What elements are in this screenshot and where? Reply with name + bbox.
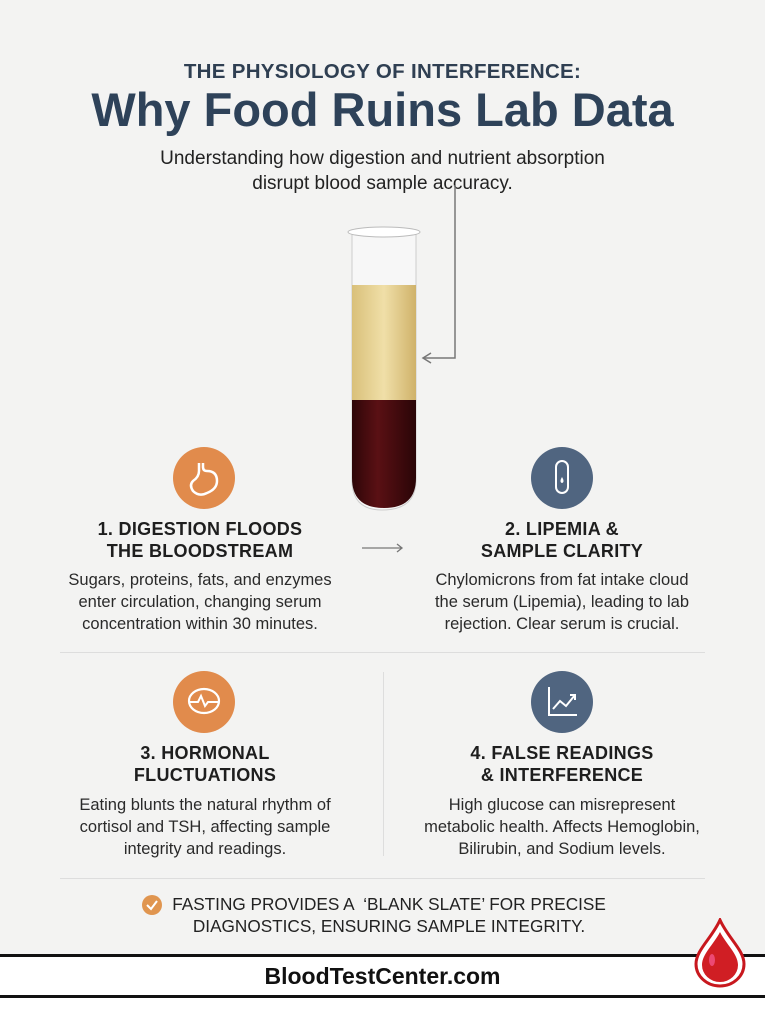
callout: fasting: FASTING PROVIDES A ‘BLANK SLATE’ FOR PRECISE — [172, 894, 606, 914]
body: cortisol and TSH, affecting sample — [80, 818, 330, 836]
body: the serum (Lipemia), leading to lab — [435, 593, 689, 611]
icon: stomach — [173, 447, 235, 509]
heading: & INTERFERENCE — [481, 765, 643, 785]
icon: blood drop logo — [694, 918, 746, 988]
panel 1: digestion — [68, 447, 332, 633]
blood tube illustration — [348, 185, 456, 510]
body: Sugars, proteins, fats, and enzymes — [68, 571, 332, 589]
body: enter circulation, changing serum — [78, 593, 322, 611]
icon: check — [142, 895, 162, 915]
heading — [98, 519, 302, 561]
icon: test tube — [531, 447, 593, 509]
heading: 3. HORMONAL — [140, 743, 270, 763]
title: Why Food Ruins Lab Data — [91, 83, 674, 136]
heading: 1. DIGESTION FLOODS — [98, 519, 302, 539]
kicker heading: THE PHYSIOLOGY OF INTERFERENCE: — [184, 60, 581, 83]
body — [68, 571, 332, 633]
body — [435, 571, 689, 633]
body: Bilirubin, and Sodium levels. — [458, 840, 666, 858]
subtitle: disrupt blood sample accuracy. — [252, 173, 513, 194]
footer: BloodTestCenter.com — [264, 963, 500, 989]
footer — [0, 954, 765, 998]
callout: fasting: DIAGNOSTICS, ENSURING SAMPLE INTEGRITY. — [193, 916, 585, 936]
small arrow — [362, 544, 403, 552]
body: Chylomicrons from fat intake cloud — [435, 571, 689, 589]
panel 4: false readings — [424, 671, 700, 858]
icon: brain — [173, 671, 235, 733]
heading — [134, 743, 276, 785]
body: Eating blunts the natural rhythm of — [79, 796, 331, 814]
subtitle: Understanding how digestion and nutrient absorption — [160, 148, 605, 169]
tube — [348, 227, 420, 510]
body: concentration within 30 minutes. — [82, 615, 318, 633]
heading: THE BLOODSTREAM — [107, 541, 293, 561]
heading: 4. FALSE READINGS — [470, 743, 654, 763]
body: integrity and readings. — [124, 840, 286, 858]
arrow to serum — [423, 185, 455, 363]
body — [79, 796, 331, 858]
panel 2: lipemia — [435, 447, 689, 633]
body — [424, 796, 700, 858]
heading: 2. LIPEMIA & — [505, 519, 619, 539]
heading: SAMPLE CLARITY — [481, 541, 643, 561]
callout: fasting — [142, 894, 606, 936]
subtitle — [160, 148, 605, 194]
body: rejection. Clear serum is crucial. — [445, 615, 679, 633]
panel 3: hormonal — [79, 671, 331, 858]
body: metabolic health. Affects Hemoglobin, — [424, 818, 700, 836]
heading: FLUCTUATIONS — [134, 765, 276, 785]
body: High glucose can misrepresent — [449, 796, 675, 814]
icon: chart — [531, 671, 593, 733]
heading — [481, 519, 643, 561]
heading — [470, 743, 654, 785]
